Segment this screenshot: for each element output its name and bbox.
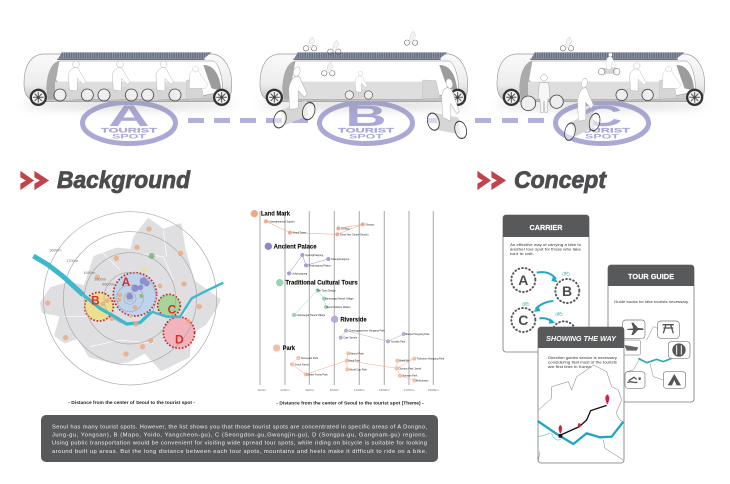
showing the way description: considering that most of the tourists [548, 360, 617, 364]
tourist spot C marker: SPOT [585, 134, 619, 140]
tourist spot A marker: TOURIST [101, 128, 157, 134]
series: Park: Olympic Park Jamsil [399, 367, 422, 370]
tour guide map and icons [623, 320, 690, 388]
series: Traditional Cultural Tours: Seoul Folklore Market [326, 306, 351, 309]
series: Riverside: Cafe Streets [343, 337, 358, 340]
area letter A: A [122, 275, 131, 289]
series: Park: Ttukseom Hangang Park [417, 358, 445, 361]
series: Land Mark: 63 Bldg [341, 227, 350, 230]
series: Park: World Cup Park [349, 368, 368, 371]
tourist spot B marker [320, 99, 412, 144]
distance axis labels: 25000m [428, 388, 439, 392]
tour guide description: Guide books for bike tourists necessary. [614, 299, 689, 304]
series: Traditional Cultural Tours: The Town Design [317, 289, 336, 292]
vehicle B with riders getting off [258, 37, 471, 108]
series: Traditional Cultural Tours [276, 279, 358, 317]
series: Ancient Palace: Gyeongbokgung [305, 254, 324, 257]
text panel: Seoul tourist spots explanation: around built up areas. But the long distance between each tour spots, mountains and heels make it difficult to ride on a bike. [52, 449, 427, 455]
ring distance labels [49, 247, 115, 287]
ring distance labels: 3600m [49, 247, 62, 252]
distance axis labels: 6900m [330, 388, 339, 392]
map pins [559, 394, 609, 434]
legend: Park: Park [283, 346, 296, 352]
legend: Park [273, 344, 296, 352]
rider leaving vehicle B on left [274, 62, 315, 130]
tourist spot C marker: TOURIST [574, 128, 630, 134]
tourist spot A marker: SPOT [112, 134, 146, 140]
ring distance labels: 1200m [94, 276, 107, 281]
highlighted area C [158, 294, 180, 317]
other dots [129, 253, 155, 318]
series: Park [273, 344, 445, 382]
showing the way description: Direction guides service is necessary [548, 355, 617, 360]
series: Land Mark: Gwanghwamun Square [269, 220, 295, 223]
rider leaving vehicle B on right [427, 72, 467, 140]
series: Ancient Palace: Unhyeongung [292, 272, 308, 275]
series: Riverside: Yeouido Park [391, 340, 406, 343]
series: Park: Seonyudo Park [301, 357, 319, 360]
highlighted area A [113, 273, 157, 316]
ring distance labels: 9600m [102, 282, 115, 287]
series: Park: Boramae [399, 360, 410, 363]
text panel: Seoul tourist spots explanation: Jung-gu, Yongsan), B (Mapo, Yoido, Yangcheon-gu), C (Seongdon-gu,Gwangjin-gu), D (Songpa-gu, Gangnam-gu) regions. [52, 432, 427, 438]
icon: swimming [625, 372, 645, 388]
tourist spot C marker [556, 99, 648, 144]
tourist spot B marker: B [345, 99, 387, 133]
distance rings [43, 212, 217, 385]
dashed route A to B [188, 118, 308, 123]
series: Park: Bukhansan [416, 379, 429, 382]
distance axis labels [257, 388, 439, 392]
legend: Traditional Cultural Tours: Traditional Cultural Tours [285, 281, 358, 287]
carrier description: another tour spot for those who take [510, 246, 582, 252]
series: Traditional Cultural Tours: Namsangol Hanok Village [325, 298, 354, 301]
carrier description: tour in unit. [510, 251, 534, 256]
card: Showing the Way [538, 327, 624, 463]
clustered palace dots [126, 277, 150, 300]
icon: airplane [623, 320, 645, 338]
route line [561, 405, 607, 435]
dashed route B to C [428, 118, 544, 123]
carrier stop diagram [511, 268, 579, 345]
tourist spot A marker: A [108, 99, 150, 133]
highlighted area B [85, 292, 113, 321]
tourist spot A marker [82, 99, 176, 144]
tourist spot B marker: SPOT [349, 134, 383, 140]
river [538, 421, 623, 444]
series: Park: Namsan Park [402, 375, 418, 378]
showing the way description [548, 355, 617, 369]
icon: tent [663, 372, 686, 388]
series: Riverside: Cheonggyecheon Hangang Park [349, 330, 385, 333]
card: Tour Guide [608, 265, 694, 402]
card header: Carrier: CARRIER [530, 225, 562, 232]
series: Riverside: Banpo Hangang Park [406, 333, 430, 336]
heading: Background: Background [57, 167, 191, 194]
tourist spot C marker: C [581, 99, 623, 133]
series: Park: Haneul Park [350, 352, 364, 355]
legend: Ancient Palace: Ancient Palace [274, 244, 317, 250]
text panel: Seoul tourist spots explanation [41, 415, 438, 462]
distance axis labels: 12200m [354, 388, 365, 392]
land silhouette [42, 220, 219, 369]
carrier description [510, 242, 582, 256]
text panel: Seoul tourist spots explanation: Seoul has many tourist spots. However, the list shows you that those tourist spots are concentrated in specific areas of A Dongno, [52, 424, 427, 430]
area letter D: D [175, 332, 184, 346]
text panel: Seoul tourist spots explanation: Using public transportation would be convenient for visiting wide spread tour spots, while riding on bicycle is suitable for looking [52, 440, 427, 446]
chart caption: - Distance from the center of Seoul to the tourist spot (Theme) - [276, 400, 424, 405]
distance axis labels: 1120m [257, 388, 267, 392]
icon: boat [623, 340, 641, 355]
distance axis labels: 18000m [379, 388, 390, 392]
dot chart: distance to tourist spot by theme [251, 210, 445, 405]
distance axis labels: 2220m [280, 388, 290, 392]
Han river [33, 256, 223, 324]
way-finding map with route [538, 365, 623, 460]
river [638, 358, 672, 363]
rooftop bicycle above vehicle B [404, 31, 418, 45]
map: tourist spot distance rings over Seoul [33, 212, 223, 405]
ring distance labels: 1700m [66, 258, 79, 263]
series: Riverside [331, 316, 430, 343]
series: Land Mark: Seoul Tower [293, 232, 306, 235]
carrier stop diagram: B [562, 283, 572, 299]
series: Park: Nanji Park [348, 360, 361, 363]
series: Park: Dream Forest Park [307, 373, 328, 376]
icon: picnic table [658, 321, 679, 338]
carrier stop diagram: A [518, 272, 528, 288]
icon: restaurant [668, 342, 690, 358]
series: Ancient Palace [265, 243, 350, 275]
series: Ancient Palace: Deoksugung Palace [309, 264, 332, 267]
distance axis labels: 24700m [404, 388, 415, 392]
series: Land Mark [251, 210, 375, 236]
ring distance labels: 1600m [83, 270, 96, 275]
series: Land Mark: Olympic [365, 223, 375, 226]
carrier description: An effective way of carrying a bike to [510, 242, 582, 247]
people beside vehicle C [521, 72, 600, 142]
legend: Riverside: Riverside [340, 317, 367, 323]
vertical distance grid lines [260, 211, 433, 385]
icon: red double chevrons [21, 172, 48, 189]
tourist spot B marker: TOURIST [338, 128, 394, 134]
card header: Tour Guide: TOUR GUIDE [628, 274, 674, 281]
tourist spot dots [45, 226, 202, 357]
series: Traditional Cultural Tours: Namsangol Hanok Village [297, 314, 326, 317]
heading: Concept: Concept [514, 167, 607, 194]
series: Ancient Palace: Changdeokgung [331, 258, 350, 261]
vehicle A with riders on board [22, 52, 235, 108]
area letter B: B [91, 294, 100, 308]
legend: Land Mark: Land Mark [261, 212, 291, 218]
map caption: - Distance from the center of Seoul to the tourist spot - [68, 400, 196, 405]
icon: red double chevrons [478, 172, 505, 189]
series: Land Mark: Seoul Arts Center Seocho [340, 233, 369, 236]
highlighted area D [163, 317, 195, 348]
distance axis labels: 4220m [305, 388, 315, 392]
showing the way description: are first time in Korea. [548, 364, 592, 369]
carrier stop diagram: C [518, 312, 528, 328]
area letter C: C [168, 302, 177, 316]
card header: Showing the Way: SHOWING THE WAY [546, 334, 617, 343]
card: Carrier [503, 215, 589, 352]
vehicle C with riders [495, 37, 708, 108]
series: Park: Seoul Forest [295, 363, 309, 366]
